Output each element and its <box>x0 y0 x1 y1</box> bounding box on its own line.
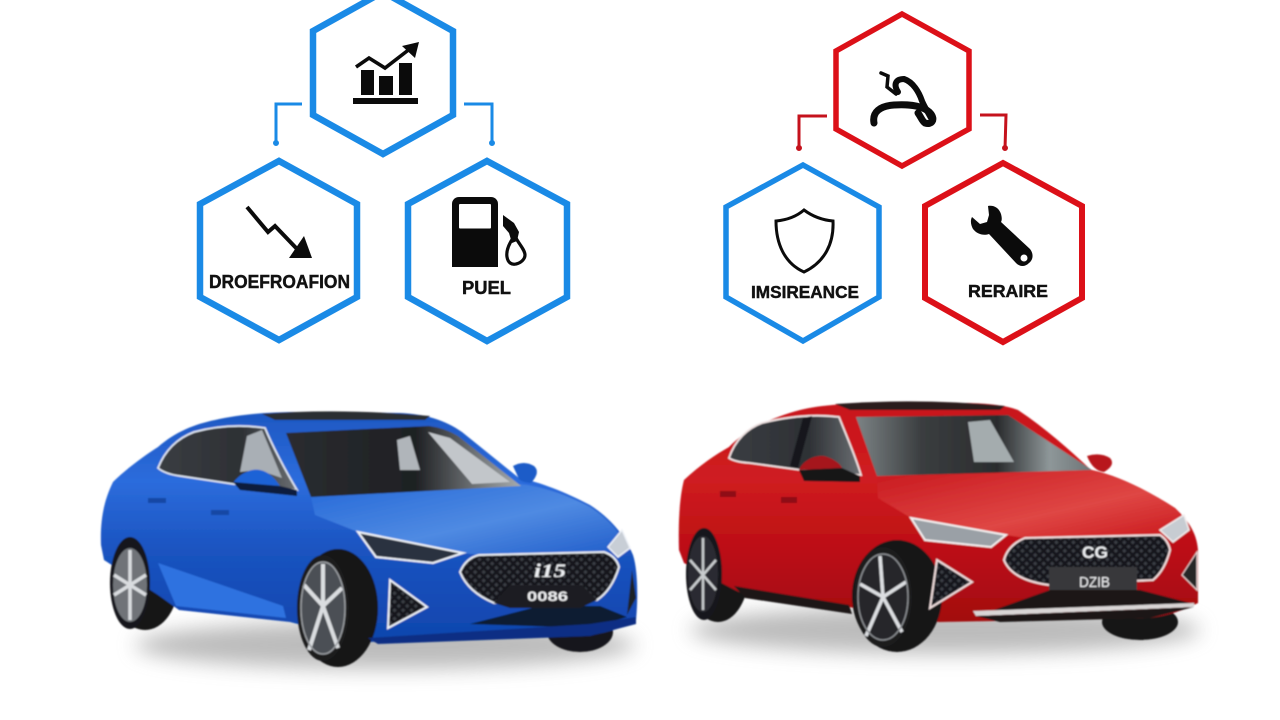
rear tyre face <box>686 528 722 620</box>
plate number: 0086 <box>527 588 568 604</box>
fog lamp <box>388 580 427 628</box>
rear rim <box>113 548 147 622</box>
left mirror <box>799 456 860 482</box>
hexagon: insurance <box>726 165 879 341</box>
fog lamp <box>930 560 972 608</box>
ground shadow: red car <box>690 606 1200 654</box>
roof dark edge <box>262 411 430 420</box>
front tyre face <box>854 547 912 647</box>
chrome strip <box>973 603 1194 616</box>
door handles <box>720 491 797 503</box>
hexagon: top blue with chart icon <box>313 0 453 154</box>
grille <box>460 552 619 608</box>
door handles <box>148 498 229 515</box>
connector: blue right <box>464 104 494 144</box>
lower grille <box>994 590 1190 610</box>
headlamp <box>358 532 463 563</box>
icon: rising bar chart <box>353 42 419 104</box>
right mirror <box>513 463 537 483</box>
label: fuel: PUEL <box>462 278 511 298</box>
hexagon: repair <box>925 163 1082 342</box>
windscreen reflection <box>428 432 510 484</box>
sill <box>734 586 852 614</box>
illustration: red car <box>679 401 1198 652</box>
icon: shield <box>776 210 833 272</box>
diagram: blue cost hexagons <box>200 0 567 341</box>
rear door glass highlight <box>240 430 282 478</box>
number plate <box>494 585 597 608</box>
ground shadow: blue car <box>135 621 635 669</box>
hexagon: fuel <box>408 161 567 341</box>
grille badge: CG <box>1082 543 1108 562</box>
lower valance <box>976 607 1194 622</box>
icon: wrench <box>971 206 1033 266</box>
pillar <box>790 416 812 468</box>
seat reflection <box>397 436 420 470</box>
rear tyre face <box>110 537 150 629</box>
windscreen <box>856 415 1092 476</box>
front tyre face <box>297 555 349 661</box>
front rim <box>858 554 908 640</box>
far fog lamp <box>627 570 636 615</box>
body <box>679 403 1198 622</box>
hood <box>877 470 1184 538</box>
hexagon: depreciation <box>200 161 357 340</box>
hexagon: top red with brake icon <box>836 14 969 166</box>
label: depreciation: DROEFROAFION <box>209 272 350 292</box>
hood <box>311 484 628 555</box>
label: insurance: IMSIREANCE <box>751 282 859 302</box>
rear tyre tread <box>687 522 749 622</box>
side glass <box>158 426 297 490</box>
front rim <box>301 562 345 654</box>
far front tyre <box>547 612 613 652</box>
plate text: DZIB <box>1079 574 1110 591</box>
connector: red left <box>798 116 827 150</box>
roof dark edge <box>835 401 1005 410</box>
left mirror <box>233 470 297 496</box>
connector: red right <box>980 115 1006 150</box>
label: repair: RERAIRE <box>968 281 1048 301</box>
right mirror <box>1087 454 1112 472</box>
front bumper lip <box>368 617 636 644</box>
illustration: blue car <box>101 411 637 667</box>
rear tyre tread <box>111 530 179 630</box>
body <box>101 412 637 642</box>
seat reflection <box>968 420 1014 462</box>
connector: blue left <box>274 104 302 144</box>
lower door crease <box>158 563 286 618</box>
front tyre tread <box>852 540 942 652</box>
number plate <box>1049 567 1137 590</box>
far headlamp <box>608 530 630 557</box>
diagram: red cost hexagons <box>726 14 1082 342</box>
grille <box>1004 535 1170 591</box>
headlamp <box>911 518 1006 547</box>
windscreen <box>286 426 521 497</box>
icon: fuel pump <box>452 197 525 267</box>
lower grille <box>470 606 627 628</box>
far fog lamp <box>1182 552 1197 590</box>
icon: falling arrow <box>247 207 312 258</box>
far headlamp <box>1160 515 1189 542</box>
icon: abstract black mark <box>874 73 933 123</box>
grille badge: i15 <box>534 561 567 582</box>
front tyre tread <box>298 549 378 667</box>
side glass <box>729 416 861 475</box>
rear rim <box>688 536 718 612</box>
far front tyre <box>1102 604 1178 640</box>
